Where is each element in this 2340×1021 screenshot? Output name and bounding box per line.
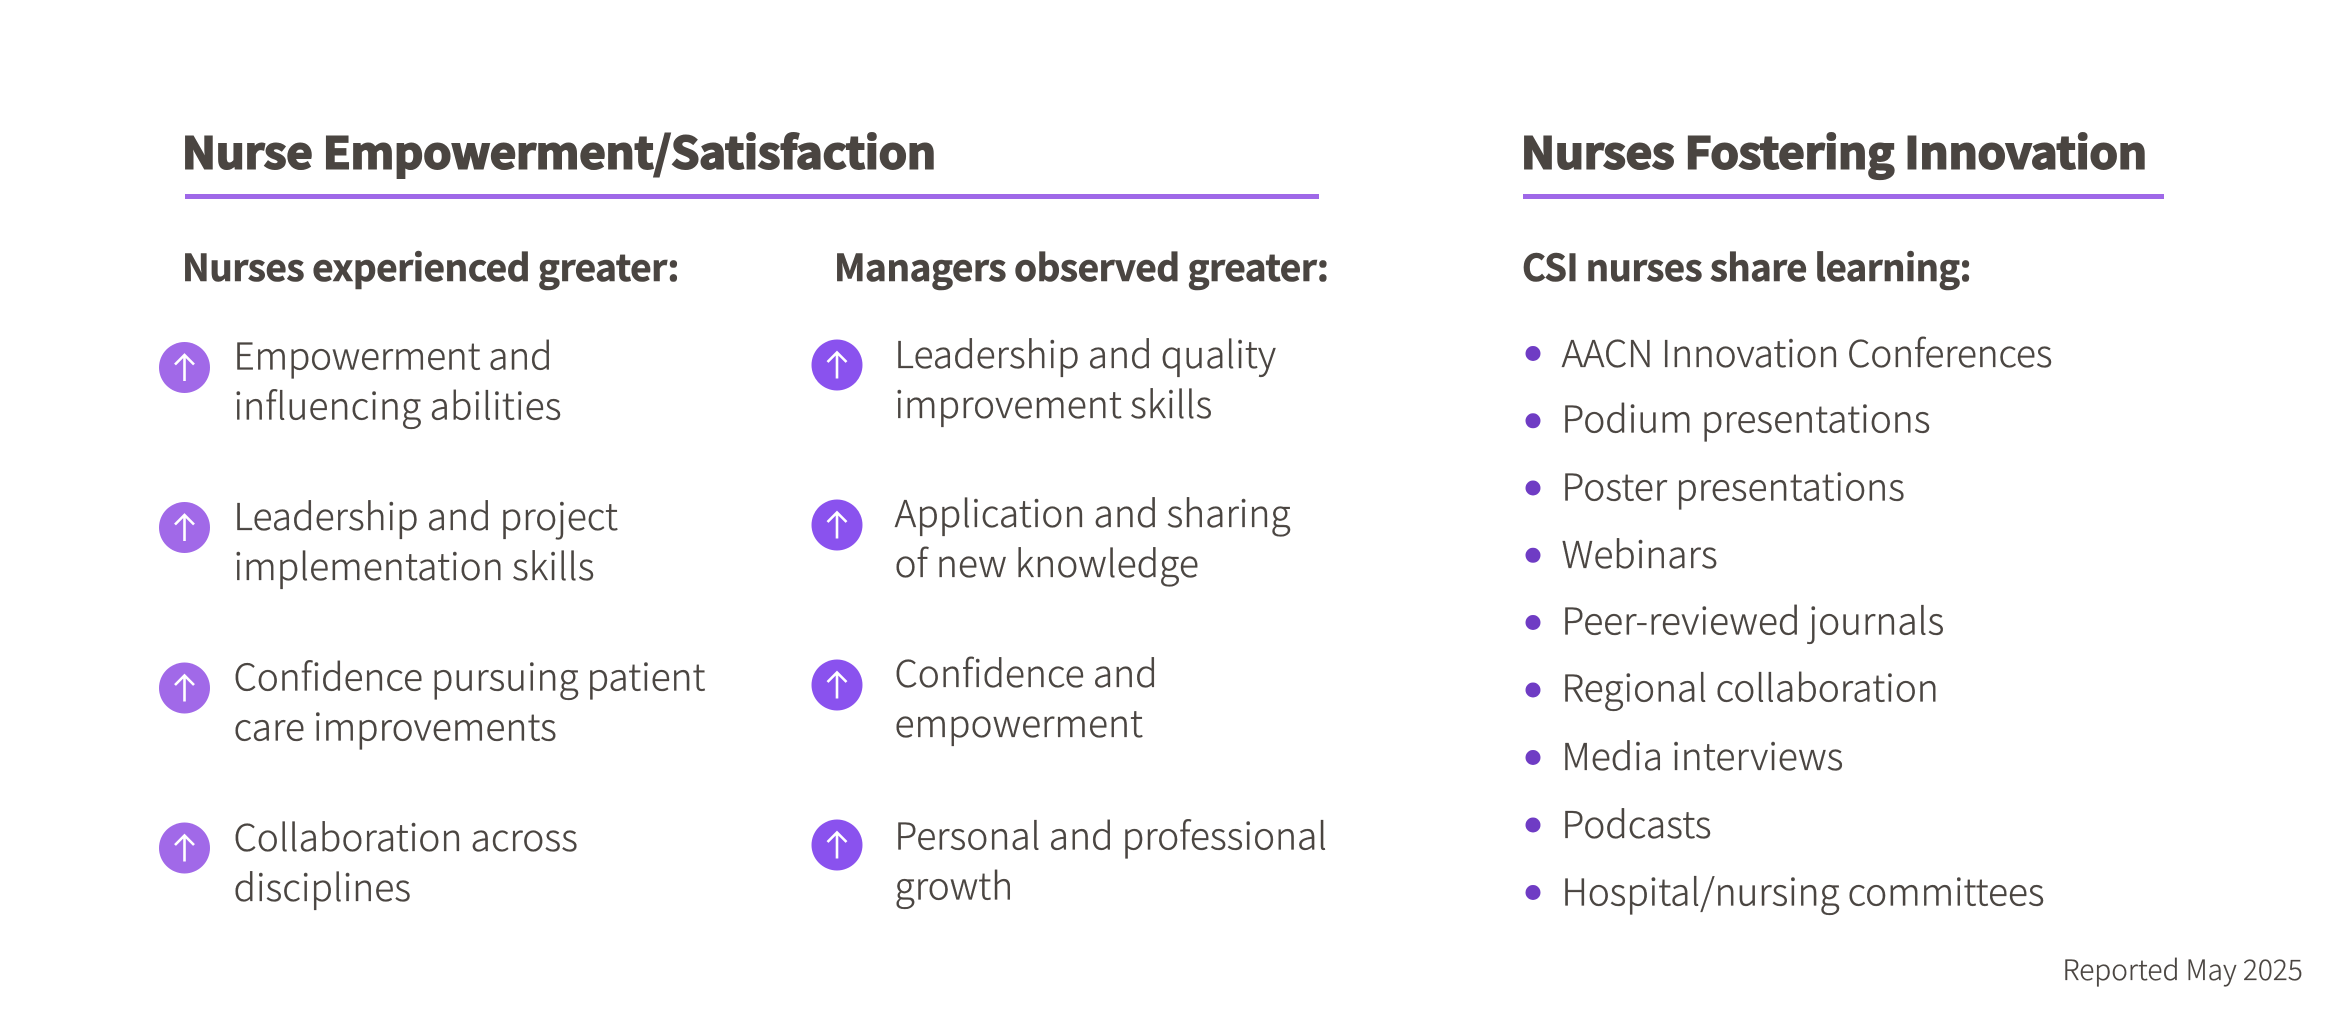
- item: empowerment: [159, 326, 562, 430]
- item: personal growth: growth: [894, 856, 1013, 910]
- footnote: Reported May 2025: [2062, 949, 2303, 989]
- heading: nurse empowerment: Nurse Empowerment/Satisfaction: [182, 118, 936, 182]
- item: application: of new knowledge: [894, 534, 1199, 588]
- bullet list: Hospital/nursing committees: [1562, 862, 2044, 916]
- item: empowerment: influencing abilities: [234, 376, 562, 430]
- item: personal growth: Personal and professional: [894, 806, 1327, 860]
- subheading: managers: Managers observed greater:: [834, 238, 1328, 292]
- bullet list: Webinars: [1562, 525, 1718, 579]
- item: leadership and quality: [812, 325, 1276, 429]
- column: nurses experienced greater: [159, 238, 706, 912]
- item: confidence: [159, 648, 706, 752]
- bullet list: Media interviews: [1562, 727, 1843, 781]
- item: application: [812, 484, 1291, 588]
- item: leadership and quality: improvement skills: [894, 375, 1212, 429]
- bullet list: AACN Innovation Conferences: [1562, 324, 2052, 378]
- subheading: nurses: Nurses experienced greater:: [182, 238, 679, 292]
- item: collaboration: disciplines: [234, 858, 411, 912]
- item: leadership: [159, 487, 618, 591]
- subheading: csi nurses: CSI nurses share learning:: [1522, 238, 1971, 292]
- item: confidence and empowerment: Confidence and: [894, 644, 1158, 698]
- item: confidence and empowerment: [812, 644, 1158, 748]
- item: confidence: care improvements: [234, 698, 557, 752]
- item: personal growth: [812, 806, 1327, 910]
- item: confidence: Confidence pursuing patient: [234, 648, 706, 702]
- item: leadership and quality: Leadership and quality: [894, 325, 1276, 379]
- item: collaboration: Collaboration across: [234, 808, 578, 862]
- heading rule: [1523, 194, 2164, 199]
- item: empowerment: Empowerment and: [234, 326, 552, 380]
- bullet list: Poster presentations: [1562, 458, 1905, 512]
- column: managers observed greater: [812, 238, 1328, 910]
- bullet list: Podcasts: [1562, 795, 1712, 849]
- heading rule: [185, 194, 1319, 199]
- panel: nurse empowerment/satisfaction: [159, 118, 1328, 912]
- bullet list: [1526, 324, 2052, 916]
- panel: nurses fostering innovation: [1521, 118, 2164, 916]
- heading: fostering innovation: Nurses Fostering Innovation: [1521, 118, 2147, 182]
- item: application: Application and sharing: [894, 484, 1291, 538]
- item: confidence and empowerment: empowerment: [894, 694, 1143, 748]
- item: collaboration: [159, 808, 578, 912]
- bullet list: Podium presentations: [1562, 390, 1931, 444]
- bullet list: Peer-reviewed journals: [1562, 592, 1944, 646]
- bullet list: Regional collaboration: [1562, 658, 1939, 712]
- item: leadership: Leadership and project: [234, 487, 618, 541]
- item: leadership: implementation skills: [234, 537, 594, 591]
